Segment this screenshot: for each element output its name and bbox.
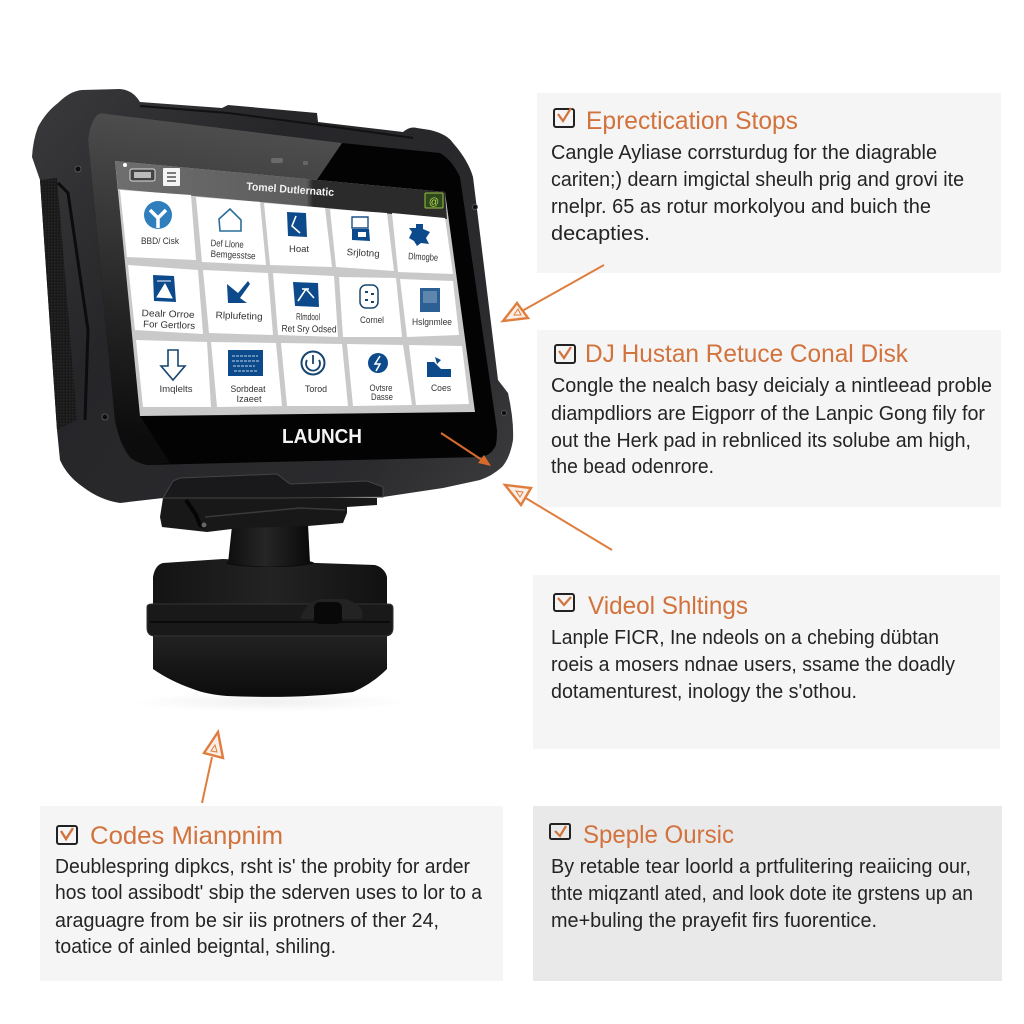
body text: the bead odenrore.	[551, 456, 714, 478]
tile: Dlmogbe	[392, 213, 453, 274]
tile: Srjlotng	[330, 209, 394, 271]
icon: checkbox	[57, 826, 77, 844]
body text: decapties.	[551, 223, 650, 245]
tile: Sorbdeat: Sorbdeat	[230, 384, 266, 395]
tile: Hoat: Hoat	[289, 244, 309, 255]
heading: Codes Mianpnim	[90, 822, 283, 850]
body text: Lanple FICR, Ine ndeols on a chebing dübtan	[551, 627, 939, 649]
tile: Imqlelts	[136, 340, 211, 407]
body text: hos tool assibodt' sbip the sderven uses to lor to a	[55, 882, 483, 904]
app screen	[115, 161, 475, 416]
panel: Codes Mianpnim	[40, 806, 503, 981]
tile: Coes: Coes	[431, 383, 451, 394]
tile: Torod: Torod	[305, 384, 327, 395]
tile: Ovtsre	[347, 344, 412, 406]
glass	[88, 113, 497, 465]
tile: Dlmogbe: Dlmogbe	[408, 251, 438, 264]
body text: cariten;) dearn imgictal sheulh prig and grovi ite	[551, 169, 964, 191]
tile: Srjlotng: Srjlotng	[346, 247, 380, 260]
tile: BBD/ Cisk	[120, 190, 196, 260]
icon: checkbox	[550, 824, 570, 839]
tile: BBD/ Cisk: BBD/ Cisk	[141, 236, 179, 247]
tile: Imqlelts: Imqlelts	[160, 384, 193, 395]
heading: Eprectication Stops	[586, 107, 798, 135]
tile: Dealr Orroe: For Gertlors	[143, 319, 196, 332]
heading: Videol Shltings	[588, 592, 748, 620]
tile: Rlplufeting: Rlplufeting	[215, 310, 263, 323]
screen background	[115, 161, 475, 416]
body text: toatice of ainled beigntal, shiling.	[55, 936, 336, 958]
body text	[551, 142, 964, 245]
panel: Speple Oursic	[533, 806, 1002, 981]
tile: Def Llone: Bemgesstse	[210, 249, 256, 262]
body text: araguagre from be sir iis protners of ther 24,	[55, 910, 439, 932]
device: LAUNCH diagnostic tablet on stand	[32, 89, 513, 712]
glass reflection	[88, 113, 342, 465]
arrow: middle panel to tablet corner	[505, 485, 612, 550]
screen header	[115, 161, 447, 219]
tile: Sorbdeat	[211, 342, 282, 407]
tile: Def Llone: Def Llone	[210, 238, 244, 251]
body text: diampdliors are Eigporr of the Lanpic Gong fily for	[551, 403, 985, 425]
body text: rnelpr. 65 as rotur morkolyou and buich the	[551, 196, 931, 218]
port on base	[300, 599, 362, 624]
tile: Rlmdool: Rlmdool	[296, 312, 320, 323]
tile: Sorbdeat: Izaeet	[236, 394, 262, 405]
panel: Eprectication Stops	[537, 93, 1001, 273]
tile: Dealr Orroe	[128, 265, 203, 334]
tile: Hoat	[264, 203, 332, 267]
arrow: top panel to tablet edge	[503, 265, 604, 321]
body text: thte miqzantl ated, and look dote ite grstens up an	[551, 883, 973, 905]
lower bumper	[163, 474, 383, 498]
panel: DJ Hustan Retuce Conal Disk	[537, 330, 1001, 507]
mount bracket	[160, 498, 377, 532]
tile: Torod	[281, 343, 348, 406]
body text: Cangle Ayliase corrsturdug for the diagrable	[551, 142, 937, 164]
icon: checkbox	[554, 108, 574, 127]
body text	[551, 375, 992, 478]
body text: me+buling the prayefit firs fuorentice.	[551, 910, 877, 932]
body text: Congle the nealch basy deicialy a nintleead proble	[551, 375, 992, 397]
body text: roeis a mosers ndnae users, ssame the doadly	[551, 654, 955, 676]
tile: Cornel: Cornel	[360, 315, 384, 326]
floor shadow	[130, 692, 410, 712]
arrow: lower panel to stand	[202, 732, 223, 803]
panel: Videol Shltings	[533, 575, 1000, 749]
tile: Dealr Orroe: Dealr Orroe	[141, 308, 195, 321]
arrow: on tablet corner	[441, 433, 491, 466]
tile: Ovtsre: Ovtsre	[370, 383, 392, 394]
heading: DJ Hustan Retuce Conal Disk	[585, 340, 908, 368]
icon: checkbox	[555, 345, 575, 363]
tablet outer body	[32, 89, 513, 503]
tile: Rlplufeting	[203, 270, 273, 335]
stand base	[147, 559, 393, 697]
tile: Cornel	[339, 277, 402, 337]
body text: out the Herk pad in rebnliced its solube am high,	[551, 430, 971, 452]
brand logo: LAUNCH	[282, 426, 362, 448]
tile: Rlmdool: Ret Sry Odsed	[281, 324, 337, 335]
side grip	[40, 178, 77, 430]
tile: Coes	[409, 345, 469, 405]
body text	[55, 856, 483, 958]
body text: dotamenturest, inology the s'othou.	[551, 681, 857, 703]
tile: Hslgnmlee: Hslgnmlee	[412, 317, 452, 328]
body text	[551, 627, 955, 703]
side groove	[58, 183, 88, 420]
tile: Rlmdool	[273, 273, 338, 337]
screen header: Tomel Dutlernatic	[246, 181, 335, 199]
body text	[551, 856, 973, 932]
tile: Def Llone	[196, 197, 266, 265]
tile: Hslgnmlee	[400, 279, 459, 337]
tile: Ovtsre: Dasse	[371, 392, 393, 403]
screws	[75, 166, 506, 420]
stand neck	[226, 524, 314, 567]
screen header: @	[429, 197, 439, 208]
camera	[271, 158, 308, 165]
body text: Deublespring dipkcs, rsht is' the probity for arder	[55, 856, 470, 878]
top edge slot	[140, 106, 413, 138]
heading: Speple Oursic	[583, 821, 734, 849]
body text: By retable tear loorld a prtfulitering reaiicing our,	[551, 856, 971, 878]
icon: checkbox	[554, 594, 574, 611]
